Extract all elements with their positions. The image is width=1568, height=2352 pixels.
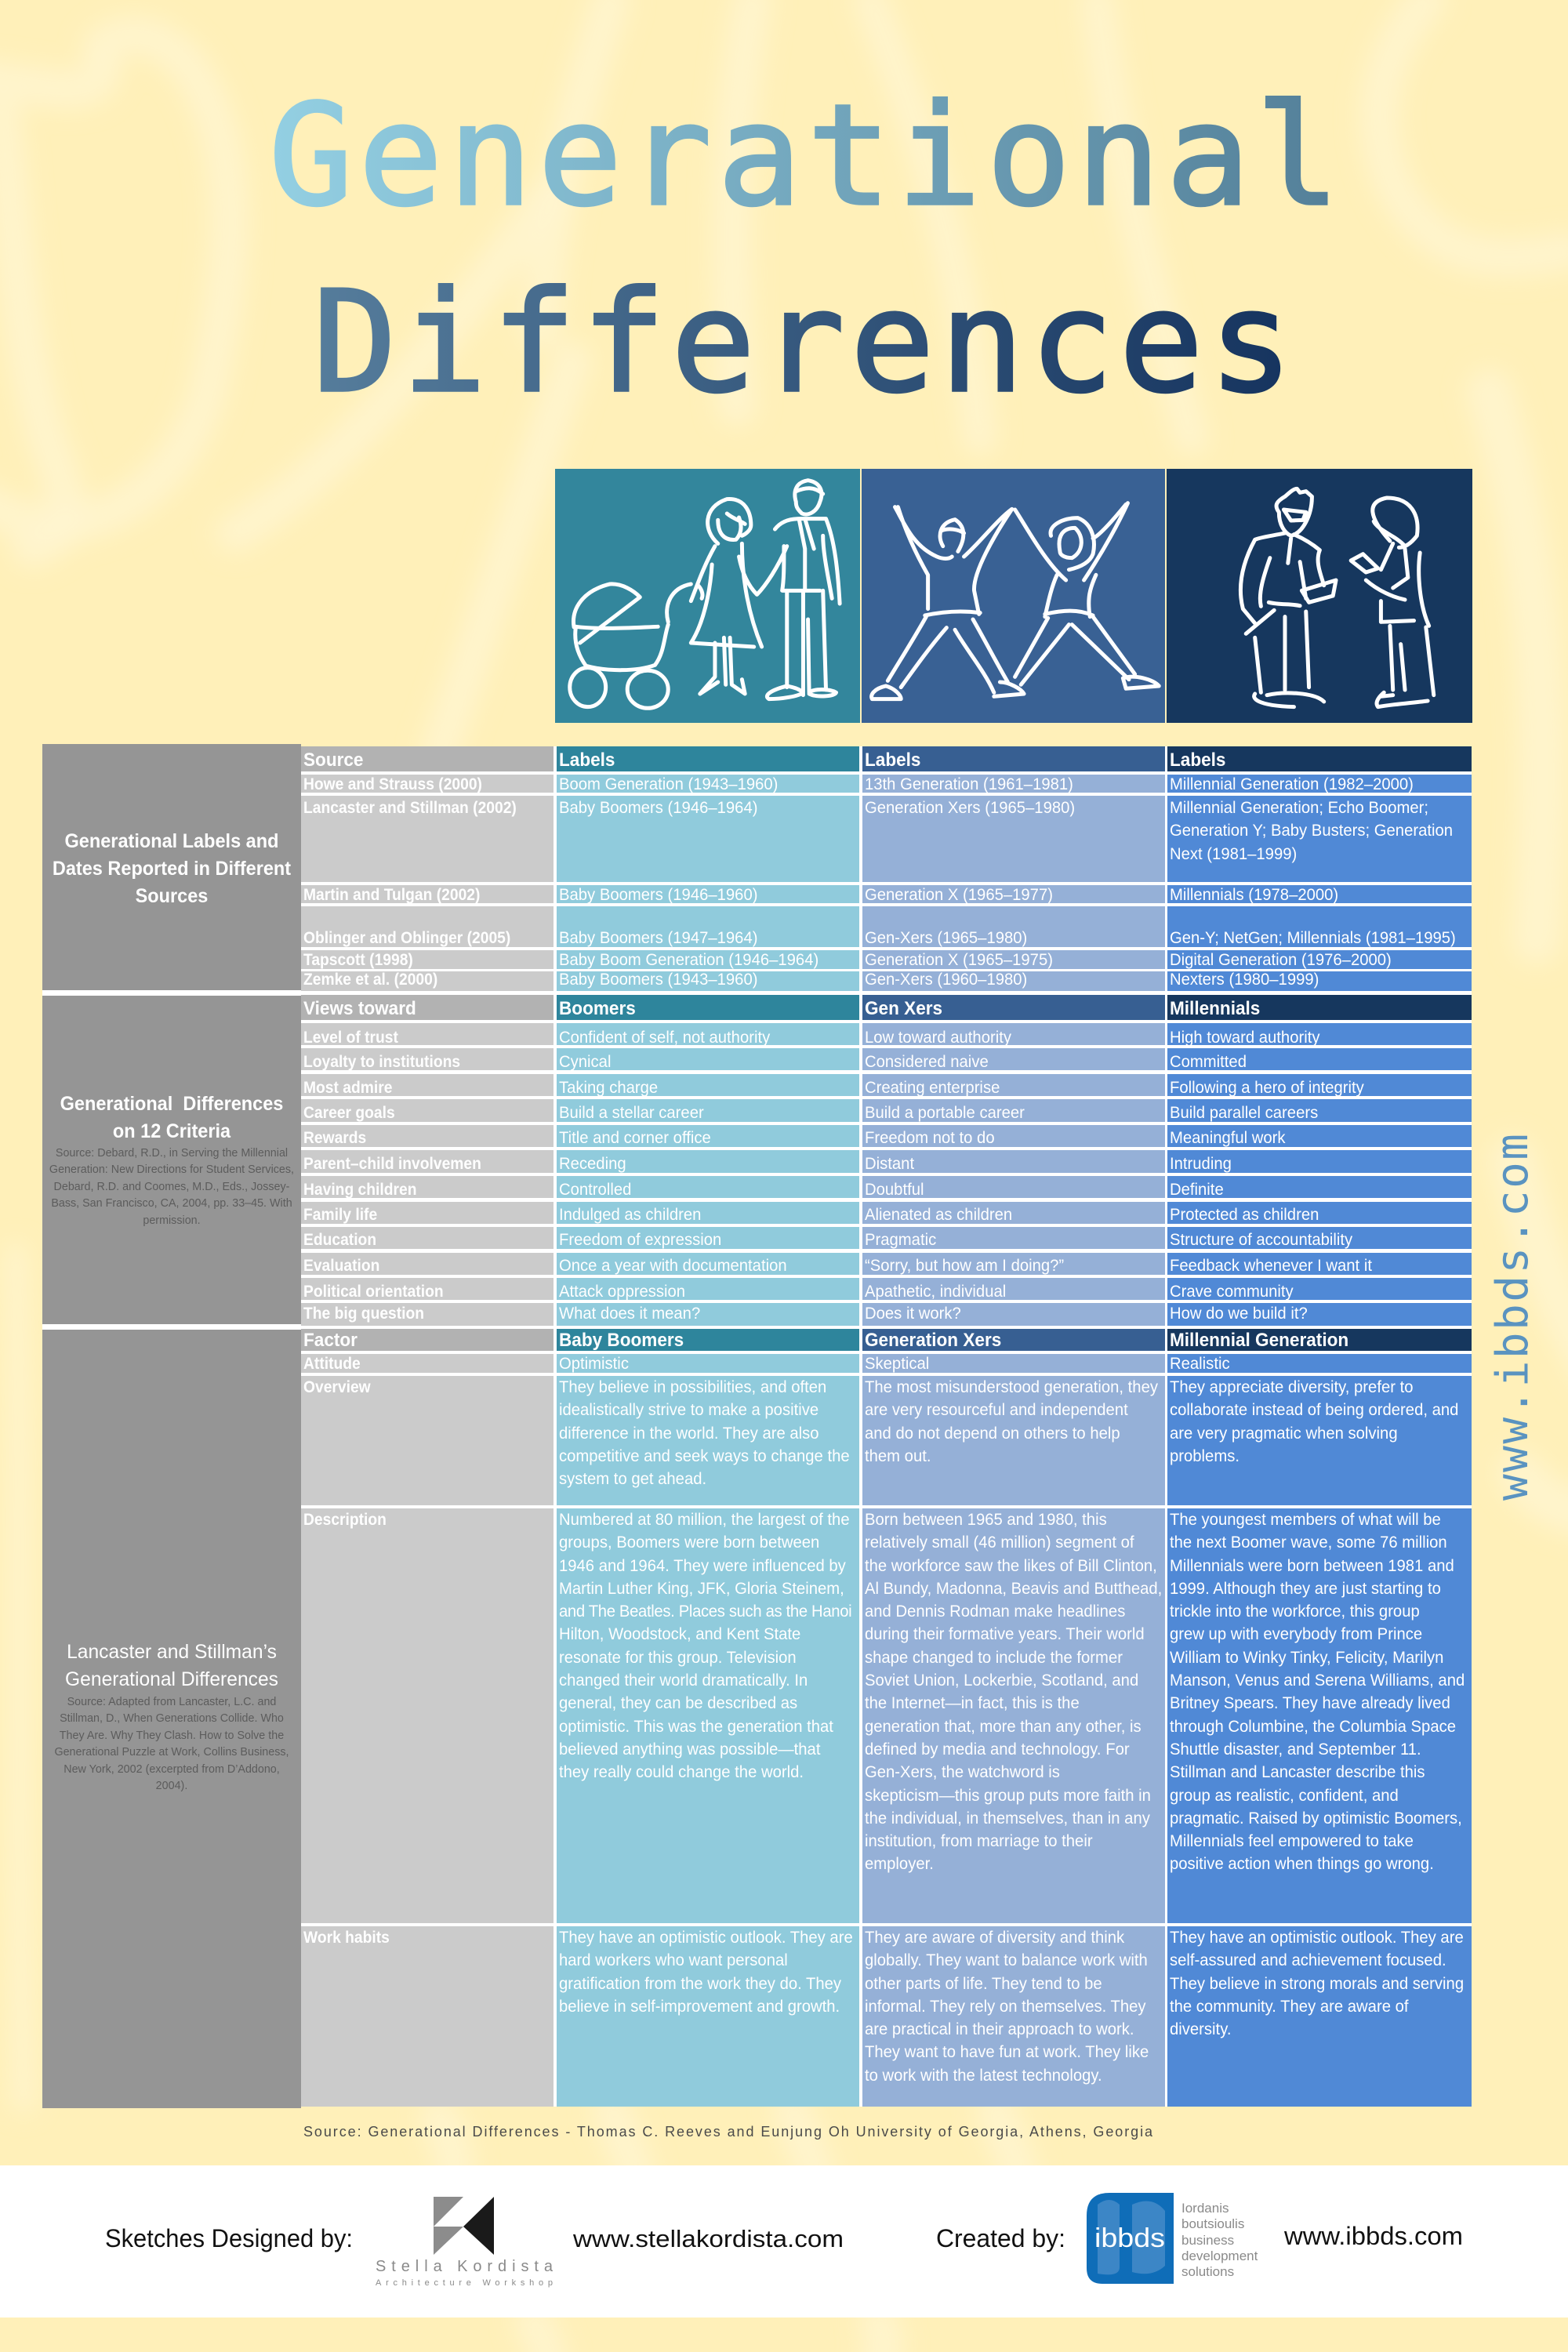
row: description: changed their world dramatically. In	[559, 1671, 808, 1690]
row: description: defined by media and technology. For	[864, 1740, 1129, 1759]
row: family life: Family life	[303, 1206, 377, 1224]
row: Zemke et al.	[301, 971, 1472, 991]
table: differences on 12 criteria	[42, 995, 1472, 1326]
row: level of trust: Low toward authority	[864, 1029, 1011, 1047]
row: Tapscott	[301, 950, 1472, 969]
row: career goals: Career goals	[303, 1104, 395, 1122]
row: description: the next Boomer wave, some 76 million	[1170, 1534, 1447, 1552]
header row: Factor	[303, 1330, 358, 1351]
row: political orientation: Crave community	[1170, 1283, 1294, 1301]
header row: Source	[303, 750, 363, 771]
row: political orientation: Political orientation	[303, 1283, 444, 1301]
row: family life: Indulged as children	[559, 1206, 701, 1224]
row: overview: are very resourceful and independent	[864, 1401, 1127, 1419]
row: Martin and Tulgan: Martin and Tulgan (2002)	[303, 886, 480, 904]
header row: Boomers	[559, 998, 636, 1019]
row: Zemke et al.: Baby Boomers (1943–1960)	[559, 971, 757, 989]
row: Oblinger and Oblinger: Baby Boomers (1947–1964)	[559, 929, 757, 947]
panel: criteria section heading	[42, 996, 301, 1324]
row: attitude	[301, 1354, 1472, 1373]
row: description: during their formative years. Their world	[864, 1625, 1144, 1643]
row: parent-child involvement: Receding	[559, 1155, 626, 1173]
row: loyalty to institutions: Considered naive	[864, 1053, 988, 1071]
row: parent-child involvement: Intruding	[1170, 1155, 1232, 1173]
row: description: groups, Boomers were born between	[559, 1534, 819, 1552]
row: level of trust: Level of trust	[303, 1029, 398, 1047]
row: level of trust: Confident of self, not authority	[559, 1029, 770, 1047]
panel: Lancaster section heading: Lancaster and Stillman’s Generational Differences	[65, 1641, 278, 1690]
logo: ibbds: boutsioulis	[1181, 2216, 1244, 2231]
row: loyalty to institutions: Loyalty to institutions	[303, 1053, 460, 1071]
stellakordista url: www.stellakordista.com	[572, 2225, 844, 2252]
header row: Views toward	[303, 998, 416, 1019]
panel: criteria section heading: Generational Differences on 12 Criteria	[60, 1093, 283, 1142]
row: Martin and Tulgan: Millennials (1978–2000)	[1170, 886, 1338, 904]
row: most admire: Following a hero of integrity	[1170, 1079, 1364, 1097]
row: the big question	[301, 1303, 1472, 1326]
row: description: 1946 and 1964. They were influenced by	[559, 1557, 846, 1575]
row: family life: Protected as children	[1170, 1206, 1319, 1224]
row: Lancaster and Stillman: Generation Xers (1965–1980)	[864, 799, 1075, 817]
row: Lancaster and Stillman: Generation Y; Baby Busters; Generation	[1170, 822, 1453, 840]
header row: Labels	[1170, 750, 1225, 771]
header row: Generation Xers	[864, 1330, 1001, 1351]
row: description: William to Winky Tinky, Felicity, Marilyn	[1170, 1649, 1443, 1667]
row: work habits: hard workers who want personal	[559, 1951, 788, 1969]
row: Zemke et al.: Zemke et al. (2000)	[303, 971, 437, 989]
row: Martin and Tulgan: Generation X (1965–1977)	[864, 886, 1052, 904]
row: description: Millennials feel empowered to take	[1170, 1832, 1414, 1850]
header row: Baby Boomers	[559, 1330, 684, 1351]
row: overview: idealistically strive to make a positive	[559, 1401, 818, 1419]
row: description: and The Beatles. Places such as the Hanoi	[559, 1602, 851, 1621]
header row: Labels	[559, 750, 615, 771]
row: description: Martin Luther King, JFK, Gloria Steinem,	[559, 1580, 844, 1598]
row: level of trust: High toward authority	[1170, 1029, 1319, 1047]
row: overview	[301, 1376, 1472, 1505]
row: Zemke et al.: Nexters (1980–1999)	[1170, 971, 1319, 989]
footer credits band	[0, 2165, 1568, 2318]
header row: Millennial Generation	[1170, 1330, 1348, 1351]
panel: baby boomers sketch	[555, 469, 860, 723]
panel: gen xers sketch	[862, 469, 1165, 723]
row: description: resonate for this group. Television	[559, 1649, 797, 1667]
row: description: Al Bundy, Madonna, Beavis and Butthead,	[864, 1580, 1162, 1598]
row: description: relatively small (46 million) segment of	[864, 1534, 1134, 1552]
row: education: Freedom of expression	[559, 1231, 721, 1249]
panel: labels section heading	[42, 744, 301, 990]
row: Howe and Strauss	[301, 775, 1472, 793]
row: rewards: Freedom not to do	[864, 1129, 994, 1147]
row: Howe and Strauss: Howe and Strauss (2000)	[303, 775, 482, 793]
row: Lancaster and Stillman: Baby Boomers (1946–1964)	[559, 799, 757, 817]
row: having children: Having children	[303, 1181, 416, 1199]
row: overview: Overview	[303, 1378, 371, 1396]
row: overview: them out.	[864, 1447, 931, 1465]
row: Howe and Strauss: 13th Generation (1961–1981)	[864, 775, 1073, 793]
panel: labels section heading: Generational Labels and Dates Reported in Different Sources	[53, 830, 291, 907]
row: education: Pragmatic	[864, 1231, 936, 1249]
row: description: grew up with everybody from Prince	[1170, 1625, 1422, 1643]
row: the big question: Does it work?	[864, 1305, 960, 1323]
vertical website text: www.ibbds.com	[1487, 1134, 1538, 1501]
row: description: institution, from marriage to their	[864, 1832, 1092, 1850]
row: work habits: believe in self-improvement and growth.	[559, 1998, 840, 2016]
row: description: Millennials were born between 1981 and	[1170, 1557, 1454, 1575]
created by text: Created by:	[936, 2224, 1065, 2252]
row: description: positive action when things go wrong.	[1170, 1855, 1434, 1873]
row: having children: Definite	[1170, 1181, 1224, 1199]
header row: Millennials	[1170, 998, 1260, 1019]
row: most admire	[301, 1074, 1472, 1097]
row: political orientation: Attack oppression	[559, 1283, 685, 1301]
row: Howe and Strauss: Millennial Generation (1982–2000)	[1170, 775, 1414, 793]
row: description: through Columbine, the Columbia Space	[1170, 1718, 1456, 1736]
row: work habits: to work with the latest technology.	[864, 2067, 1102, 2085]
row: description: Stillman and Lancaster describe this	[1170, 1763, 1425, 1781]
row: description: they really could change the world.	[559, 1763, 804, 1781]
panel: Lancaster section heading: Source: Adapted from Lancaster, L.C. and Stillman, D., When Generations Collide. Who They Are. Why They Clash. How to Solve the Generational Puzzle at Work, Collins Business, New York, 2002 (excerpted from D’Addono, 2004).	[54, 1695, 289, 1792]
logo: ibbds: solutions	[1181, 2264, 1234, 2279]
row: family life: Alienated as children	[864, 1206, 1012, 1224]
row: Lancaster and Stillman: Next (1981–1999)	[1170, 845, 1297, 863]
row: description: Hilton, Woodstock, and Kent State	[559, 1625, 800, 1643]
row: most admire: Taking charge	[559, 1079, 658, 1097]
row: Zemke et al.: Gen-Xers (1960–1980)	[864, 971, 1027, 989]
row: description: Soviet Union, Lockerbie, Scotland, and	[864, 1671, 1138, 1690]
row: career goals: Build parallel careers	[1170, 1104, 1318, 1122]
row: evaluation: Evaluation	[303, 1257, 379, 1275]
row: education: Structure of accountability	[1170, 1231, 1352, 1249]
row: Oblinger and Oblinger	[301, 906, 1472, 947]
table: generational labels and dates	[42, 744, 1472, 991]
row: Lancaster and Stillman: Millennial Generation; Echo Boomer;	[1170, 799, 1428, 817]
row: having children: Doubtful	[864, 1181, 924, 1199]
row: evaluation: Feedback whenever I want it	[1170, 1257, 1372, 1275]
row: overview: The most misunderstood generation, they	[864, 1378, 1157, 1396]
row: political orientation	[301, 1278, 1472, 1301]
row: description: Numbered at 80 million, the largest of the	[559, 1511, 850, 1529]
row: description: skepticism—this group puts more faith in	[864, 1787, 1150, 1805]
logo: ibbds: ibbds	[1094, 2223, 1165, 2253]
row: Oblinger and Oblinger: Gen-Xers (1965–1980)	[864, 929, 1027, 947]
row: description: 1999. Although they are just starting to	[1170, 1580, 1441, 1598]
logo: Stella Kordista: Stella Kordista	[376, 2258, 554, 2275]
row: Howe and Strauss: Boom Generation (1943–1960)	[559, 775, 778, 793]
row: work habits: They have an optimistic outlook. They are	[559, 1929, 853, 1947]
header row	[301, 995, 1472, 1020]
row: evaluation	[301, 1253, 1472, 1275]
panel: Lancaster section heading	[42, 1330, 301, 2108]
row: description: optimistic. This was the generation that	[559, 1718, 833, 1736]
row: description: employer.	[864, 1855, 933, 1873]
row: family life	[301, 1202, 1472, 1224]
row: work habits	[301, 1926, 1472, 2107]
row: most admire: Creating enterprise	[864, 1079, 1000, 1097]
row: rewards	[301, 1125, 1472, 1147]
logo: ibbds: Iordanis	[1181, 2201, 1229, 2216]
row: having children	[301, 1176, 1472, 1199]
row: most admire: Most admire	[303, 1079, 392, 1097]
title: Differences	[313, 261, 1293, 423]
row: Tapscott: Tapscott (1998)	[303, 951, 413, 969]
row: description: Shuttle disaster, and September 11.	[1170, 1740, 1421, 1759]
row: rewards: Rewards	[303, 1129, 366, 1147]
row: work habits: the community. They are aware of	[1170, 1998, 1409, 2016]
row: description: believed anything was possible—that	[559, 1740, 820, 1759]
header row: Gen Xers	[864, 998, 942, 1019]
row: parent-child involvement: Distant	[864, 1155, 914, 1173]
title: Generational	[269, 74, 1340, 237]
logo: Stella Kordista	[376, 2197, 554, 2288]
row: rewards: Meaningful work	[1170, 1129, 1286, 1147]
row: work habits: They are aware of diversity and think	[864, 1929, 1124, 1947]
table: Lancaster and Stillman differences	[42, 1329, 1472, 2108]
row: the big question: The big question	[303, 1305, 424, 1323]
row: description: and Dennis Rodman make headlines	[864, 1602, 1125, 1621]
row: overview: are very pragmatic when solving	[1170, 1425, 1398, 1443]
row: overview: collaborate instead of being ordered, and	[1170, 1401, 1458, 1419]
row: description: the individual, in themselves, than in any	[864, 1809, 1149, 1828]
row: loyalty to institutions: Cynical	[559, 1053, 611, 1071]
sketches credit text: Sketches Designed by:	[105, 2224, 353, 2252]
logo: Stella Kordista: Architecture Workshop	[376, 2278, 553, 2288]
panel: millennials sketch	[1167, 469, 1472, 723]
row: loyalty to institutions: Committed	[1170, 1053, 1247, 1071]
row: attitude: Skeptical	[864, 1355, 929, 1373]
row: overview: problems.	[1170, 1447, 1240, 1465]
row: work habits: Work habits	[303, 1929, 390, 1947]
row: description: The youngest members of what will be	[1170, 1511, 1441, 1529]
row: work habits: other parts of life. They tend to be	[864, 1975, 1102, 1993]
row: Martin and Tulgan	[301, 885, 1472, 904]
row: description: generation that, more than any other, is	[864, 1718, 1141, 1736]
row: career goals	[301, 1099, 1472, 1122]
row: parent-child involvement	[301, 1150, 1472, 1173]
logo: ibbds	[1087, 2193, 1261, 2284]
ibbds url: www.ibbds.com	[1283, 2222, 1463, 2250]
row: description: shape changed to include the former	[864, 1649, 1122, 1667]
row: description: trickle into the workforce, this group	[1170, 1602, 1420, 1621]
row: the big question: How do we build it?	[1170, 1305, 1308, 1323]
row: Lancaster and Stillman	[301, 796, 1472, 882]
row: attitude: Optimistic	[559, 1355, 629, 1373]
row: Tapscott: Generation X (1965–1975)	[864, 951, 1052, 969]
row: Martin and Tulgan: Baby Boomers (1946–1960)	[559, 886, 757, 904]
row: description: Britney Spears. They have already lived	[1170, 1694, 1450, 1712]
row: overview: competitive and seek ways to change the	[559, 1447, 850, 1465]
row: description: the Internet—in fact, this is the	[864, 1694, 1079, 1712]
row: evaluation: Once a year with documentation	[559, 1257, 787, 1275]
row: overview: difference in the world. They are also	[559, 1425, 819, 1443]
row: description: general, they can be described as	[559, 1694, 797, 1712]
row: work habits: gratification from the work they do. They	[559, 1975, 841, 1993]
row: overview: system to get ahead.	[559, 1470, 706, 1488]
header row	[301, 746, 1472, 771]
row: Tapscott: Baby Boom Generation (1946–1964)	[559, 951, 818, 969]
row: description: the workforce saw the likes of Bill Clinton,	[864, 1557, 1156, 1575]
row: description: pragmatic. Raised by optimistic Boomers,	[1170, 1809, 1462, 1828]
header row	[301, 1329, 1472, 1351]
row: having children: Controlled	[559, 1181, 631, 1199]
row: work habits: self-assured and achievement focused.	[1170, 1951, 1446, 1969]
row: the big question: What does it mean?	[559, 1305, 700, 1323]
row: work habits: diversity.	[1170, 2020, 1231, 2038]
row: overview: They believe in possibilities, and often	[559, 1378, 826, 1396]
row: description: Born between 1965 and 1980, this	[864, 1511, 1106, 1529]
row: Oblinger and Oblinger: Oblinger and Oblinger (2005)	[303, 929, 510, 947]
logo: ibbds: development	[1181, 2249, 1258, 2263]
row: overview: They appreciate diversity, prefer to	[1170, 1378, 1414, 1396]
row: attitude: Realistic	[1170, 1355, 1230, 1373]
row: education: Education	[303, 1231, 376, 1249]
generation sketch panels	[555, 469, 1472, 723]
row: Oblinger and Oblinger: Gen-Y; NetGen; Millennials (1981–1995)	[1170, 929, 1456, 947]
row: description	[301, 1508, 1472, 1923]
row: work habits: informal. They rely on themselves. They	[864, 1998, 1145, 2016]
row: career goals: Build a stellar career	[559, 1104, 704, 1122]
row: description: Description	[303, 1511, 387, 1529]
row: description: Gen-Xers, the watchword is	[864, 1763, 1059, 1781]
row: work habits: globally. They want to balance work with	[864, 1951, 1147, 1969]
header row: Labels	[864, 750, 920, 771]
row: level of trust	[301, 1023, 1472, 1047]
row: evaluation: “Sorry, but how am I doing?”	[864, 1257, 1064, 1275]
title	[269, 74, 1340, 423]
row: parent-child involvement: Parent–child involvemen	[303, 1155, 481, 1173]
row: political orientation: Apathetic, individual	[864, 1283, 1006, 1301]
row: education	[301, 1227, 1472, 1249]
row: work habits: They have an optimistic outlook. They are	[1170, 1929, 1464, 1947]
row: work habits: are practical in their approach to work.	[864, 2020, 1134, 2038]
row: attitude: Attitude	[303, 1355, 361, 1373]
row: rewards: Title and corner office	[559, 1129, 711, 1147]
row: career goals: Build a portable career	[864, 1104, 1024, 1122]
row: description: group as realistic, confident, and	[1170, 1787, 1399, 1805]
row: description: Manson, Venus and Serena Williams, and	[1170, 1671, 1465, 1690]
row: loyalty to institutions	[301, 1048, 1472, 1071]
row: work habits: They want to have fun at work. They like	[864, 2043, 1149, 2061]
logo: ibbds: business	[1181, 2233, 1234, 2248]
panel: criteria section heading: Source: Debard, R.D., in Serving the Millennial Generation: New Directions for Student Services, Debard, R.D. and Coomes, M.D., Eds., Jossey- Bass, San Francisco, CA, 2004, pp. 33–45. With permission.	[49, 1146, 294, 1227]
row: Lancaster and Stillman: Lancaster and Stillman (2002)	[303, 799, 517, 817]
row: Tapscott: Digital Generation (1976–2000)	[1170, 951, 1392, 969]
source line: Source: Generational Differences - Thomas C. Reeves and Eunjung Oh University of Georgia, Athens, Georgia	[303, 2124, 1153, 2140]
row: overview: and do not depend on others to help	[864, 1425, 1120, 1443]
row: work habits: They believe in strong morals and serving	[1170, 1975, 1464, 1993]
